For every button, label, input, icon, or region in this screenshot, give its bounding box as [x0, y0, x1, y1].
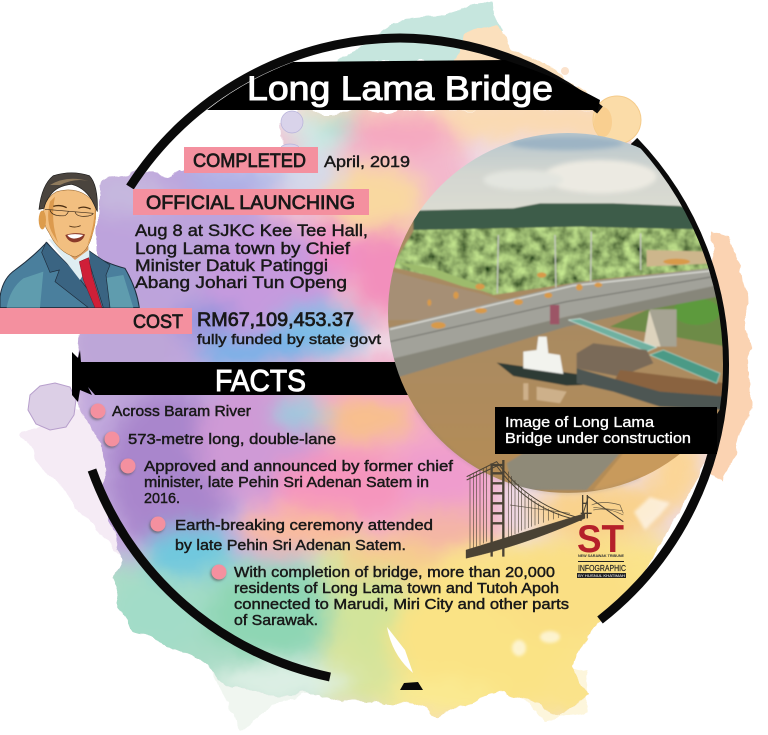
- photo: boat reflection: [523, 383, 567, 403]
- facts list: by late Pehin Sri Adenan Satem.: [175, 538, 406, 554]
- portrait of chief minister: [0, 173, 139, 308]
- bullet: connection: [212, 564, 226, 580]
- facts list: minister, late Pehin Sri Adenan Satem in: [144, 475, 429, 491]
- facts heading: FACTS: [215, 363, 306, 398]
- title: Long Lama Bridge: [247, 70, 553, 108]
- wash: teal and peach top splash: [335, 2, 600, 110]
- completed label band: [184, 147, 318, 173]
- portrait: shirt: [48, 239, 89, 280]
- photo: lamp posts: [497, 232, 641, 293]
- caption box: [495, 407, 717, 454]
- wash base: broad colour zones: [70, 100, 690, 720]
- bullet: length: [104, 432, 120, 446]
- facts list: Earth-breaking ceremony attended: [175, 518, 433, 534]
- photo: barge cargo: [616, 370, 722, 397]
- completed label: COMPLETED: [193, 151, 306, 172]
- photo: distant hills: [413, 203, 727, 230]
- cost amount: RM67,109,453.37: [197, 310, 354, 331]
- portrait: glasses: [45, 209, 93, 216]
- launching details: Abang Johari Tun Openg: [135, 274, 347, 292]
- bridge photo: [380, 130, 747, 493]
- logo infographic label: INFOGRAPHIC: [578, 564, 626, 573]
- logo byline: BY HUSNUL KHATIMAH: [578, 573, 625, 578]
- cost label: COST: [133, 312, 183, 333]
- wash: lilac blob: [28, 383, 76, 430]
- launching details: Minister Datuk Patinggi: [135, 257, 328, 275]
- logo newspaper name: NEW SARAWAK TRIBUNE: [578, 553, 624, 558]
- bridge: far hills: [510, 502, 623, 515]
- photo: lighter bank strip: [404, 263, 486, 291]
- official launching block: [133, 189, 369, 292]
- photo edge shadow: [415, 408, 640, 493]
- photo: tug boat cabin: [523, 337, 563, 374]
- photo: bridge underside: [394, 286, 716, 377]
- black ring: [92, 38, 724, 690]
- facts list: of Sarawak.: [234, 613, 318, 629]
- cost label band: [0, 308, 192, 334]
- photo caption: Bridge under construction: [505, 430, 691, 447]
- logo letters: ST: [577, 518, 624, 561]
- launching details: Aug 8 at SJKC Kee Tee Hall,: [135, 222, 368, 240]
- launching label: OFFICIAL LAUNCHING: [146, 193, 355, 214]
- cost note: fully funded by state govt: [197, 331, 381, 347]
- facts list: [90, 404, 569, 629]
- launching label band: [133, 189, 369, 215]
- photo: deck markings: [390, 271, 713, 342]
- portrait: hair: [39, 173, 97, 212]
- wash: main colour field: [76, 110, 708, 718]
- bridge: far tower: [581, 495, 592, 518]
- portrait: tie: [79, 258, 102, 308]
- wash: small peach dot: [561, 67, 569, 75]
- photo: grey reflection: [507, 453, 620, 490]
- cost row: [0, 308, 381, 347]
- facts list: 2016.: [144, 491, 180, 507]
- facts heading bar: [72, 350, 420, 402]
- photo: main river: [388, 320, 622, 493]
- wash: pale lilac left splash: [20, 410, 125, 560]
- completed row: [184, 147, 410, 173]
- newspaper logo: [577, 518, 626, 578]
- bullet: approval: [120, 458, 136, 474]
- portrait: brows and nose: [53, 206, 91, 227]
- portrait: hair highlight: [50, 179, 88, 185]
- facts list: Across Baram River: [112, 404, 251, 420]
- ring: short bottom fragment: [400, 682, 423, 690]
- ring: top-left arc: [130, 38, 600, 187]
- facts list: 573-metre long, double-lane: [128, 432, 336, 448]
- facts list: residents of Long Lama town and Tutoh Apoh: [234, 581, 559, 597]
- portrait: suit: [0, 242, 139, 308]
- completed date: April, 2019: [324, 154, 410, 171]
- bridge: hangers: [470, 467, 558, 550]
- wash: white gaps near logo: [512, 497, 670, 656]
- title bar: [207, 60, 600, 110]
- photo: far yard: [647, 250, 713, 267]
- photo: bridge deck: [388, 268, 714, 358]
- bridge: main cable: [467, 462, 623, 522]
- photo: barge hull: [577, 368, 727, 410]
- portrait: lapels: [42, 242, 110, 308]
- photo: orange barriers: [427, 259, 690, 329]
- facts list: Approved and announced by former chief: [144, 459, 454, 475]
- wash: peach right splash: [708, 232, 750, 482]
- bullet: across river: [90, 404, 106, 418]
- photo caption: [495, 407, 717, 454]
- launching details: [135, 222, 368, 292]
- launching details: Long Lama town by Chief: [135, 240, 350, 258]
- portrait: face shade: [48, 197, 96, 245]
- photo: tree belt: [394, 226, 708, 296]
- photo: clouds: [483, 137, 657, 193]
- photo: barge deck cargo: [577, 343, 653, 377]
- photo: tug boat hull: [497, 363, 583, 386]
- photo: bridge pier: [643, 309, 677, 347]
- portrait: neck: [53, 228, 88, 260]
- photo: teal truss right: [650, 350, 720, 383]
- facts bar shape: [72, 350, 420, 402]
- wash: white gap in bottom paint: [387, 627, 413, 673]
- facts list: With completion of bridge, more than 20,000: [234, 565, 555, 581]
- portrait: face: [43, 190, 96, 257]
- photo: hanging load: [550, 305, 559, 324]
- caption text: Image of Long Lama: [505, 414, 655, 431]
- photo: sky: [420, 133, 683, 212]
- wash: peach blob at ring gap: [593, 96, 641, 144]
- title bar shape: [207, 60, 600, 110]
- portrait: ear: [39, 211, 46, 229]
- bridge: deck: [466, 513, 585, 558]
- portrait: mouth: [65, 233, 85, 242]
- facts list: connected to Marudi, Miri City and other parts: [234, 597, 569, 613]
- photo: bank under bridge: [610, 296, 722, 346]
- photo: bright bank: [673, 298, 720, 325]
- photo: base ground: [392, 220, 708, 321]
- bridge: near tower: [492, 460, 503, 557]
- wash: pale foot splash: [200, 650, 592, 730]
- icon: suspension bridge sketch: [466, 460, 623, 558]
- wash: small lilac petals: [281, 111, 303, 152]
- logo rule: [578, 561, 624, 562]
- bullet: ceremony: [150, 516, 166, 532]
- portrait: suit shading: [7, 272, 133, 308]
- logo byline box: [577, 573, 626, 578]
- photo: lower right tone: [594, 454, 680, 490]
- ring: lower-left arc: [92, 470, 330, 677]
- photo: far river: [388, 272, 500, 320]
- ring: right arc: [600, 141, 724, 620]
- photo: teal truss left: [568, 319, 657, 352]
